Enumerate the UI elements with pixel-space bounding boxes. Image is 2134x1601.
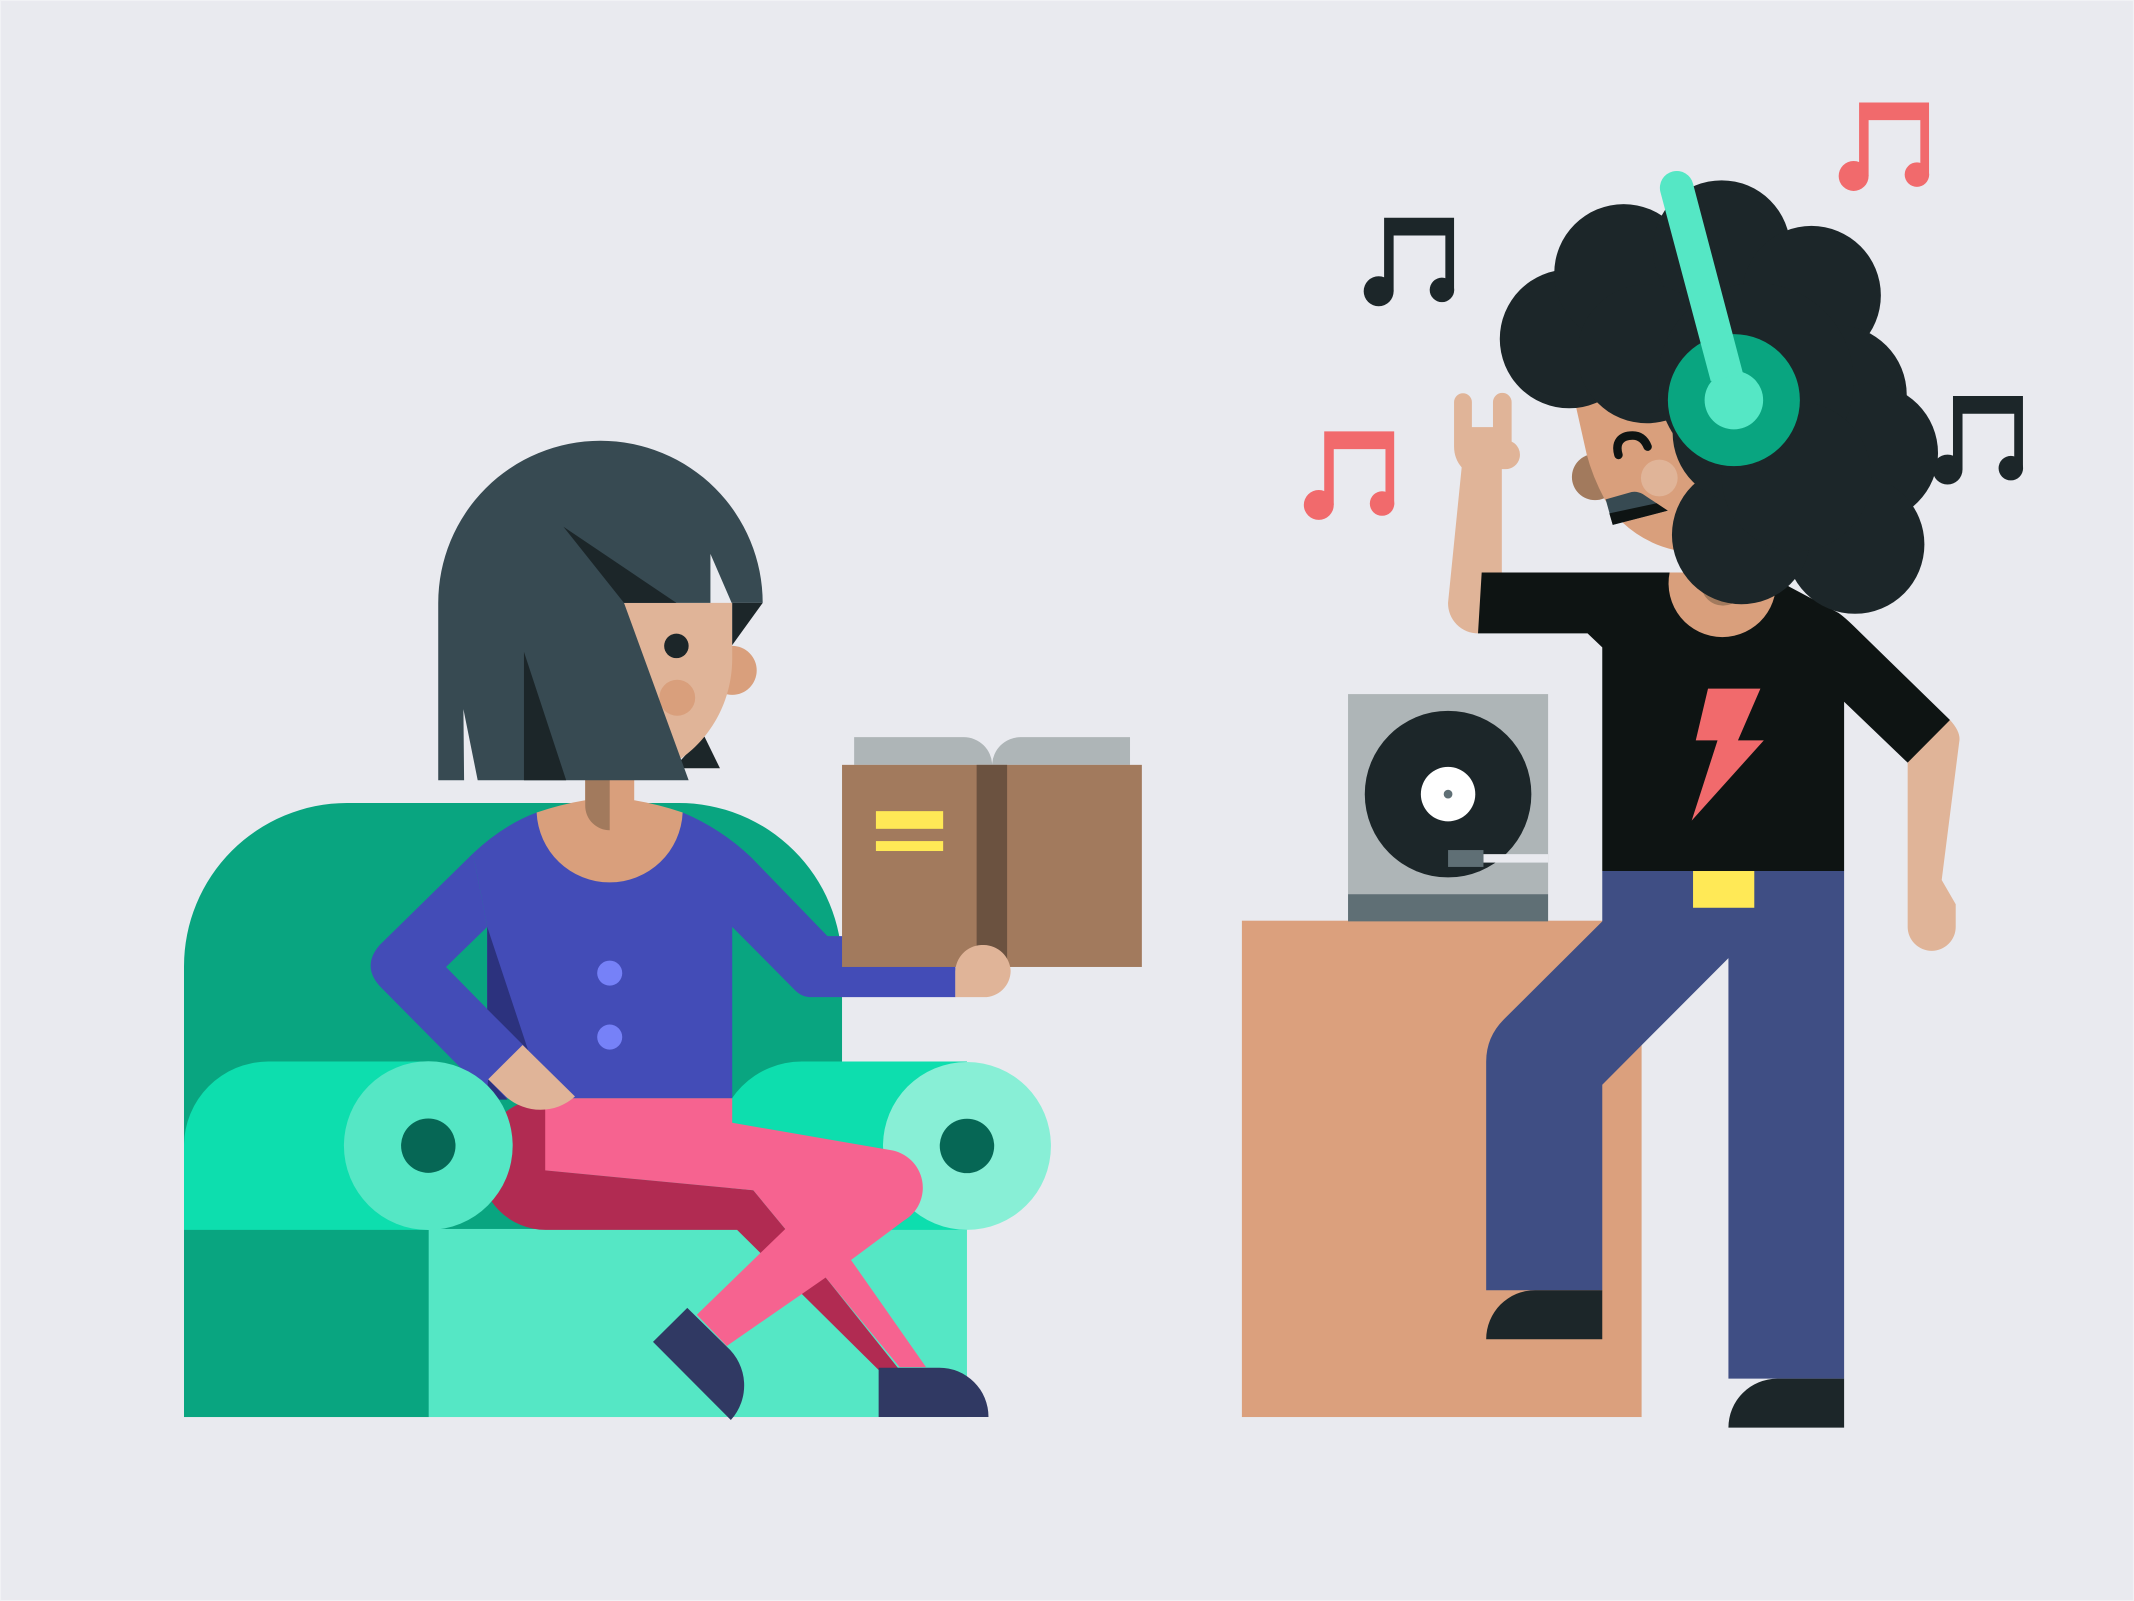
- woman bent arm: [371, 853, 523, 1096]
- fringe shadow: [563, 527, 676, 603]
- tonearm: [1483, 854, 1548, 863]
- woman front leg: [545, 1098, 926, 1367]
- face: [1573, 395, 1718, 550]
- back shoe: [879, 1368, 988, 1417]
- ear: [708, 646, 757, 695]
- neck: [1669, 573, 1776, 637]
- moustache: [1606, 492, 1668, 525]
- man t-shirt: [1478, 573, 1950, 871]
- headphones: [1660, 171, 1800, 466]
- sleeve shadow: [487, 1079, 508, 1100]
- record spindle: [1444, 790, 1452, 798]
- woman head: [438, 441, 763, 780]
- neck shadow: [585, 776, 610, 830]
- music note: top red: [1839, 102, 1929, 191]
- eye: [664, 634, 689, 658]
- shirt buttons: [597, 961, 622, 1050]
- book title bars: [876, 811, 943, 851]
- right shoe: [1728, 1379, 1844, 1428]
- front shoe: [653, 1308, 744, 1420]
- tonearm head: [1448, 850, 1483, 867]
- left armrest cylinder: [184, 1062, 429, 1230]
- cheek: [659, 680, 695, 716]
- right armrest end: [883, 1062, 1051, 1230]
- headband: [1660, 171, 1743, 381]
- hair tip: [732, 603, 763, 645]
- turntable: [1348, 694, 1548, 921]
- sofa back: [184, 803, 842, 1229]
- hair: [438, 441, 763, 780]
- book: [842, 737, 1142, 967]
- torso shadow: [487, 927, 528, 1050]
- record label: [1421, 767, 1475, 821]
- face: [624, 603, 732, 765]
- woman torso and book arm: [473, 812, 955, 1098]
- neck shadow: [1701, 562, 1745, 606]
- belt buckle: [1693, 871, 1754, 908]
- man head: [1572, 395, 1718, 550]
- cheek: [1641, 460, 1678, 496]
- sofa: [184, 803, 1051, 1417]
- woman neck: [537, 776, 683, 882]
- hair behind chin: [674, 735, 720, 768]
- woman resting hand: [488, 1045, 575, 1110]
- left armrest end: [344, 1061, 513, 1230]
- ear cup: [1668, 334, 1800, 466]
- sofa seat: [429, 1229, 967, 1417]
- book cover: [842, 765, 1142, 967]
- lightning bolt: [1692, 689, 1764, 821]
- man shoes: [1486, 1290, 1844, 1428]
- eye: [1617, 436, 1648, 455]
- music note: top dark: [1364, 218, 1454, 306]
- man raised arm and hand: [1448, 393, 1520, 633]
- left shoe: [1486, 1290, 1602, 1339]
- hair shadow: [524, 652, 566, 780]
- turntable body: [1348, 694, 1548, 894]
- book pages: [854, 737, 1130, 765]
- armrest disc: [344, 1061, 513, 1230]
- ear cup inner: [1705, 371, 1763, 429]
- moustache shadow: [1609, 503, 1668, 525]
- woman hand on book: [955, 945, 1011, 997]
- right armrest cylinder: [717, 1062, 967, 1230]
- woman back leg: [480, 1098, 900, 1370]
- turntable base: [1348, 894, 1548, 921]
- woman shoes: [653, 1308, 988, 1420]
- man trousers: [1486, 871, 1844, 1379]
- man afro hair: [1500, 180, 1938, 614]
- man neck: [1669, 562, 1776, 637]
- music note: left red: [1304, 431, 1394, 520]
- music note: right dark: [1933, 396, 2023, 485]
- book spine: [977, 765, 1007, 967]
- right armrest button: [940, 1119, 994, 1173]
- table: [1242, 921, 1642, 1417]
- man lowered arm: [1908, 720, 1960, 951]
- armrest button: [401, 1118, 456, 1173]
- vinyl record: [1365, 711, 1531, 877]
- sofa base left: [184, 1229, 429, 1417]
- nose: [1572, 454, 1618, 500]
- neckline: [537, 780, 683, 882]
